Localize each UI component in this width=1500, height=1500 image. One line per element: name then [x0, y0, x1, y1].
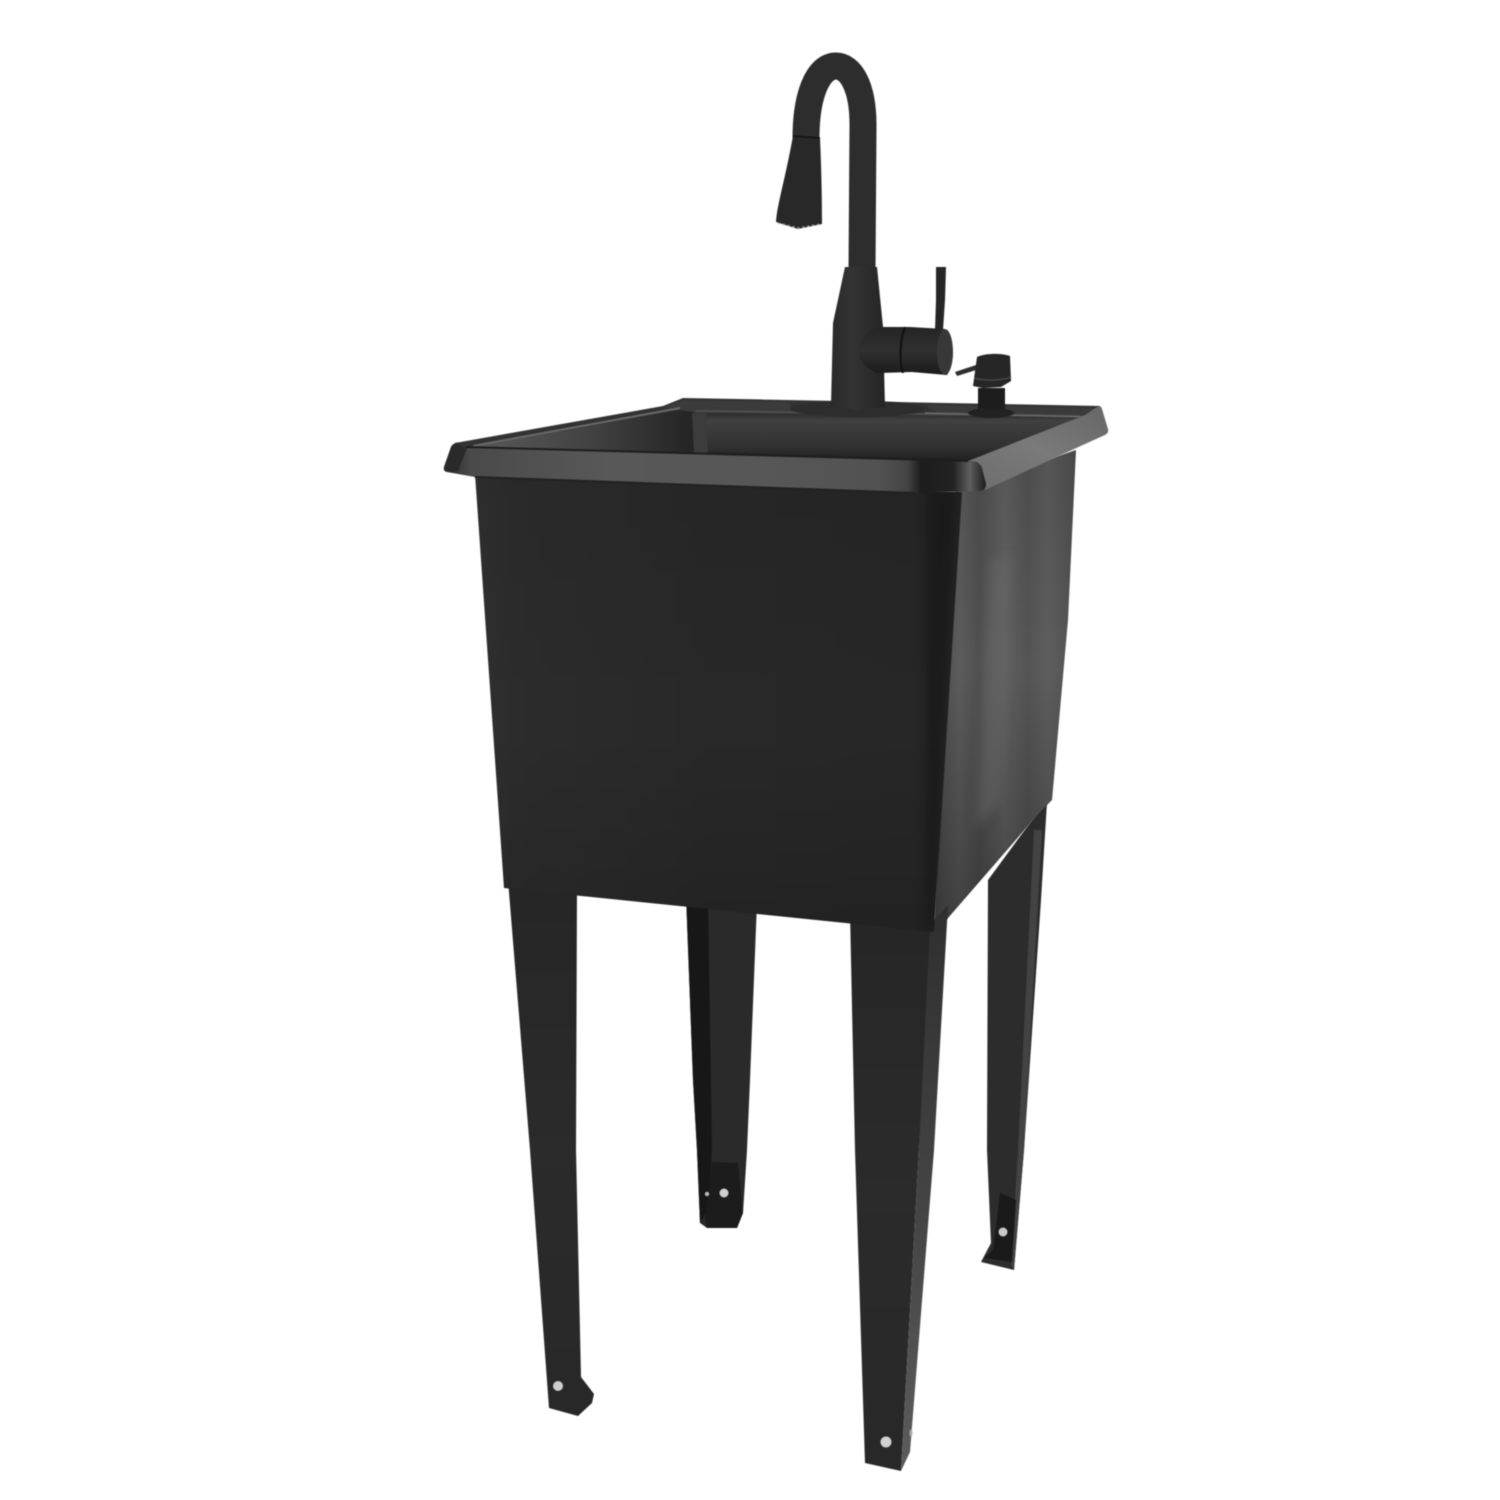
- faucet: [776, 66, 953, 410]
- faucet gooseneck: [806, 66, 863, 270]
- sink rim: front band: [444, 443, 986, 493]
- front-right leg: [850, 905, 948, 1471]
- back-right leg: [981, 802, 1047, 1270]
- pull-down spray head: [776, 136, 822, 229]
- sink rim: right band: [968, 406, 1108, 490]
- basin left wall: [473, 410, 700, 455]
- back-center leg: [686, 895, 757, 1228]
- product illustration: black utility sink: [442, 52, 1109, 1472]
- front-left leg: [508, 880, 594, 1416]
- basin back wall: [695, 413, 1080, 462]
- sink tub: right side face: [934, 450, 1076, 932]
- sink tub: front face: [475, 474, 962, 932]
- lever handle: [859, 267, 953, 375]
- deck plate: [791, 401, 925, 417]
- soap dispenser: [955, 354, 1014, 418]
- sink basin: rim deck, back wall and interior: [455, 398, 1100, 465]
- faucet base: [831, 267, 885, 410]
